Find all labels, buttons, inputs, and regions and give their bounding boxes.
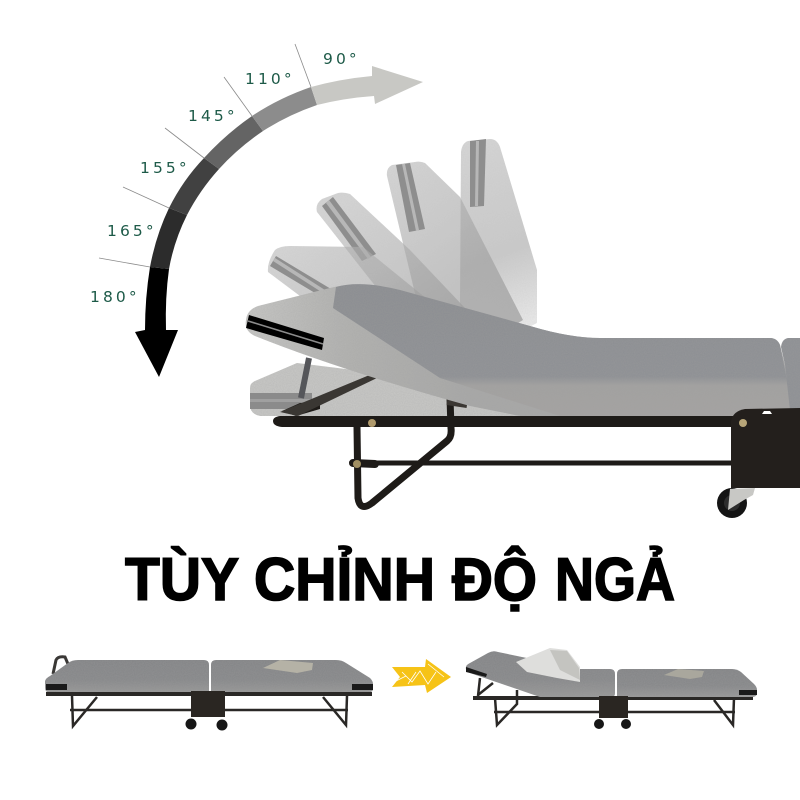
frame rail (473, 696, 753, 700)
label 155: 155° (140, 159, 190, 177)
folding leg (357, 398, 451, 507)
cushions (45, 660, 373, 693)
bed flat (45, 657, 373, 730)
legs and crossbar (70, 696, 348, 726)
title: ĐỘ (452, 546, 537, 613)
wheels (594, 719, 604, 729)
handle (53, 657, 68, 674)
cushion upper surface (333, 284, 790, 416)
title (125, 546, 675, 613)
black webbing strap (246, 315, 324, 350)
arc segment: 165 degrees (150, 208, 187, 269)
ghost backrest 165 degrees (268, 246, 490, 380)
castor wheel (717, 488, 755, 518)
ghost backrest positions (268, 139, 537, 380)
angle labels (90, 50, 360, 306)
title: TÙY (125, 546, 239, 613)
label 165: 165° (107, 222, 157, 240)
main bed illustration (246, 139, 800, 518)
arc segment: 155 degrees (169, 158, 219, 215)
backrest support strut (280, 358, 377, 416)
pillow (516, 648, 580, 682)
side plate (731, 408, 800, 488)
arc segment: 110 degrees (252, 87, 317, 131)
plate (599, 696, 628, 718)
label 145: 145° (188, 107, 238, 125)
wheels (186, 718, 196, 730)
side rail (273, 416, 735, 427)
magazine (664, 669, 704, 679)
label 90: 90° (323, 50, 360, 68)
straps (46, 684, 67, 690)
frame rail (46, 692, 372, 696)
raised cushion (466, 651, 615, 697)
bed reclined (466, 648, 757, 729)
plate (191, 691, 225, 717)
tick lines (99, 44, 311, 267)
arc segment: 180 degrees arrow (135, 267, 178, 377)
recline angle gauge (90, 44, 423, 377)
frame bolts (353, 419, 376, 468)
legs and crossbar (478, 678, 735, 725)
ghost backrest 145 degrees (387, 162, 523, 365)
metal frame (353, 398, 731, 507)
second cushion section (781, 338, 800, 410)
reclined cushion (246, 284, 790, 416)
arc segment: 145 degrees (204, 116, 263, 169)
straps (466, 667, 487, 677)
yellow scribble arrow (392, 659, 451, 693)
linkage cap (447, 402, 467, 405)
arc arrow: 90 degrees (311, 66, 423, 105)
second cushion (617, 669, 757, 697)
plate bolt (739, 419, 747, 427)
ghost backrest 155 degrees (317, 193, 500, 372)
plate slots (762, 411, 772, 414)
ghost backrest 110 degrees (460, 139, 537, 350)
magazine (263, 660, 313, 673)
crossbar (375, 460, 731, 466)
ghost flat cushion (250, 363, 520, 416)
title: NGẢ (555, 546, 675, 613)
title: CHỈNH (254, 546, 435, 613)
label 180: 180° (90, 288, 140, 306)
label 110: 110° (245, 70, 295, 88)
